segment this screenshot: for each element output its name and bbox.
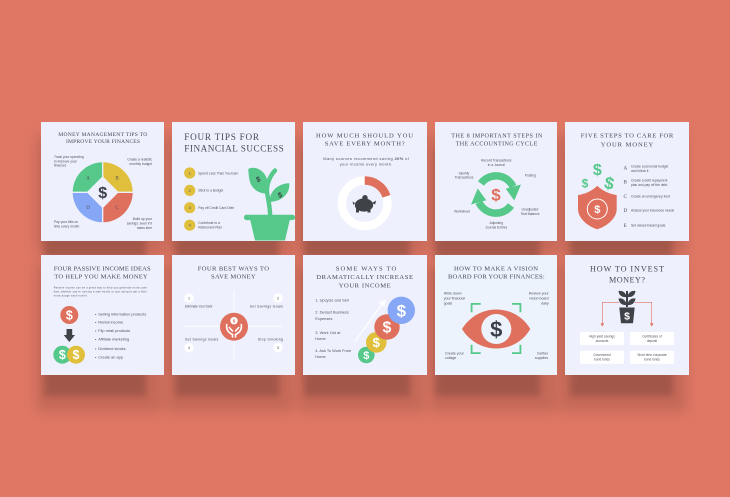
heading: accounting cycle: THE 8 IMPORTANT STEPS IN [451,134,543,140]
pie chart: four segments [71,161,134,224]
cycle labels [454,158,540,229]
panel: vision board [435,255,557,375]
heading: passive income [54,266,151,281]
heading: passive income: TO HELP YOU MAKE MONEY [54,274,148,281]
numbered list: 4 [189,223,192,228]
panel: how to invest [565,255,689,375]
heading: four tips: FINANCIAL SUCCESS [184,144,284,154]
bullet list [95,311,146,359]
numbered list: 2 [189,188,192,193]
labels: Set Savings Goals [250,304,283,308]
labels: Write down [444,292,462,296]
heading: money management tips: IMPROVE YOUR FINANCES [66,139,140,145]
heading: five steps: FIVE STEPS TO CARE FOR [581,133,674,140]
heading: accounting cycle [451,134,543,148]
text: build up savings [127,217,153,230]
cycle labels: Transactions [455,176,474,180]
heading: best ways to save [198,266,269,281]
text: create a budget: Create a realistic [127,158,152,162]
heading: increase your income: SOME WAYS TO [336,266,397,273]
bullet list: Rental income [98,320,123,325]
labels [185,304,283,341]
steps list [624,165,674,229]
option boxes: Government [593,353,611,357]
bullet list: • [95,354,97,359]
pie chart: four segments: A [86,176,90,182]
arrow: growth [355,300,386,341]
text: build up savings: Build up your [133,217,153,221]
panel: five steps [565,122,689,241]
option boxes: Certificates of [642,334,662,338]
icon: coins and arrow [53,306,85,364]
heading: vision board: BOARD FOR YOUR FINANCES: [448,274,545,281]
numbered list: 1. Upcycle and Sell [315,298,349,303]
donut chart: 20 percent [342,180,388,226]
text: intro: Passive income can be a great way to help you generate extra cash [54,287,147,290]
text: intro: extra dough each month. [54,294,88,298]
text: build up savings: takes time [137,226,152,230]
icon: eye with dollar: $ [490,317,502,342]
icon: money plant: $ [255,174,262,184]
pie chart: four segments: B [115,176,119,182]
cycle labels: Record Transactions [481,158,512,162]
labels: Review your [529,292,549,296]
cycle labels: Worksheet [454,210,470,214]
text: recommendation [323,156,410,167]
option boxes: accounts [596,339,609,343]
steps list: E [624,223,627,229]
labels: Eliminate Your Debt [185,304,212,308]
heading: how much to save: HOW MUCH SHOULD YOU [316,133,413,140]
numbered list: Home [315,336,326,341]
heading: how to invest: MONEY? [609,276,645,285]
icon: coins and arrow: $ [59,348,66,362]
cycle labels: in a Journal [488,163,505,167]
option boxes: High yield savings [589,334,615,338]
heading: increase your income: DRAMATICALLY INCREASE [316,274,413,281]
bullet list: • [95,328,97,333]
steps list: Create a personal budget [631,165,668,169]
heading: accounting cycle: THE ACCOUNTING CYCLE [456,142,538,148]
bullet list: Flip retail products [98,328,130,333]
icon: coins and arrow: $ [66,308,73,322]
heading: increase your income [316,266,413,290]
steps list: plan and pay off the debt [631,183,667,187]
labels: Set Savings Goals [185,337,219,341]
icon: green dollars [582,162,616,194]
labels: goals [444,302,452,306]
icon: growing coins [358,297,415,363]
bullet list: • [95,336,97,341]
panel: increase your income [303,255,427,375]
bullet list: Create an app [98,354,123,359]
panel: how much to save [303,122,427,241]
option boxes: Short term corporate [637,353,667,357]
icon: green dollars: $ [582,176,589,190]
icon: growing coins: $ [373,335,381,350]
panel: best ways to save [172,255,295,375]
numbered list: 3. Work Out at [315,330,341,335]
heading: four tips [184,132,284,154]
text: build up savings: savings: even if it [127,222,152,226]
numbered list: Stick to a Budget [198,189,223,193]
text: track your spending: to improve your [54,159,78,163]
numbered list: 3 [189,205,192,210]
icon: green dollars: $ [603,173,616,194]
panel: accounting cycle [435,122,557,241]
icon: money plant [244,168,295,240]
panel: passive income [41,255,164,375]
cross dividers and number badges: 1 [188,296,191,300]
steps list: D [624,208,628,214]
bullet list: Selling information products [98,311,146,316]
pie chart: four segments: $ [98,185,107,202]
icon: growing coins: $ [363,350,369,362]
heading: how much to save: SAVE EVERY MONTH? [325,141,405,148]
text: track your spending [54,155,84,168]
steps list: and follow it [631,169,648,173]
labels [444,292,549,360]
numbered list: 1 [189,170,192,176]
bullet list: • [95,311,97,316]
numbered list: 2. Deduct Business [315,310,349,315]
option boxes: bond funds [594,358,610,362]
labels: supplies [535,356,548,360]
labels: Stop Smoking [258,337,283,341]
cycle labels: Unadjusted [522,208,539,212]
heading: money management tips [58,132,147,145]
numbered list: Retirement Plan [198,226,222,230]
steps list: C [624,194,628,200]
text: pay your bills [54,220,79,228]
icon: hands holding coin: $ [233,318,236,323]
labels: daily [541,302,549,306]
text: recommendation: your income every month. [340,162,392,167]
heading: how to invest [590,265,664,285]
numbered list: Home [315,354,326,359]
panel: four tips for financial success [172,122,295,241]
steps list: Assess your insurance needs [631,209,674,213]
heading: five steps: YOUR MONEY [601,141,654,148]
text: track your spending: finances [54,164,67,168]
cycle labels: Journal Entries [485,225,508,229]
icon: growing coins: $ [397,301,407,320]
text: intro: flow, whether you're running a side hustle or just trying to get a little [54,291,147,294]
steps list: Create a debt repayment [631,178,668,182]
text: create a budget [127,158,152,166]
heading: best ways to save: FOUR BEST WAYS TO [198,266,269,273]
heading: five steps [581,133,674,148]
icon: growing coins: $ [383,320,392,337]
heading: passive income: FOUR PASSIVE INCOME IDEAS [54,266,151,273]
icon: money plant: $ [277,190,284,200]
numbered list: Spend Less Than You Earn [198,171,239,175]
numbered list: Expenses [315,316,332,321]
text: track your spending: Track your spending [54,155,84,159]
heading: how to invest: HOW TO INVEST [590,265,664,274]
option boxes: bond funds [644,358,660,362]
steps list: B [624,180,628,186]
text: intro [54,287,147,298]
icon: piggy bank [352,195,376,212]
bullet list: • [95,320,97,325]
cycle labels: Trial Balance [520,212,540,216]
icon: green dollars: $ [593,162,602,179]
connector arrows [601,302,653,326]
icon: money plant pot: $ [624,310,630,322]
steps list: Create an emergency fund [631,194,670,198]
cycle labels: Identify [459,171,470,175]
cross dividers and number badges [184,290,283,360]
icon: cycle arrows: $ [491,186,501,204]
bullet list: Affiliate marketing [98,336,129,341]
heading: vision board [448,266,545,281]
panel: money management tips [41,122,164,241]
option boxes: deposit [647,339,657,343]
cross dividers and number badges: 4 [188,345,191,350]
cross dividers and number badges: 2 [277,296,280,300]
labels: vision board [529,297,549,301]
option boxes [580,332,674,364]
numbered list [184,167,239,231]
text: pay your bills: Pay your bills on [54,220,78,224]
numbered list: 4. Ask To Work From [315,348,351,353]
heading: four tips: FOUR TIPS FOR [184,132,260,142]
steps list: Set values-based goals. [631,223,666,227]
heading: vision board: HOW TO MAKE A VISION [454,266,538,273]
numbered list [315,298,351,359]
bullet list: • [95,346,97,351]
cycle labels: Adjusting [490,221,503,225]
labels: collage [445,356,456,360]
text: create a budget: monthly budget [129,162,152,166]
labels: your financial [444,297,465,301]
icon: coins and arrow: $ [73,348,80,362]
labels: Create your [445,351,465,355]
numbered list: Contribute to a [198,221,220,225]
icon: shield: $ [594,204,600,216]
text: recommendation: Many sources recommend saving 20% of [323,156,410,161]
bullet list: Dividend stocks [98,346,126,351]
heading: increase your income: YOUR INCOME [339,282,391,290]
text: pay your bills: time every month [54,224,79,228]
icon: green corner brackets [472,304,520,353]
cycle labels: Posting [525,174,536,178]
heading: best ways to save: SAVE MONEY [211,274,256,281]
pie chart: four segments: D [86,206,90,211]
heading: how much to save [316,133,413,148]
steps list: A [624,166,628,172]
numbered list: Pay off Credit Card Debt [198,206,234,210]
labels: Gather [537,351,549,355]
pie chart: four segments: C [115,206,119,211]
cross dividers and number badges: 3 [277,345,280,350]
heading: money management tips: MONEY MANAGEMENT TIPS TO [58,132,147,138]
